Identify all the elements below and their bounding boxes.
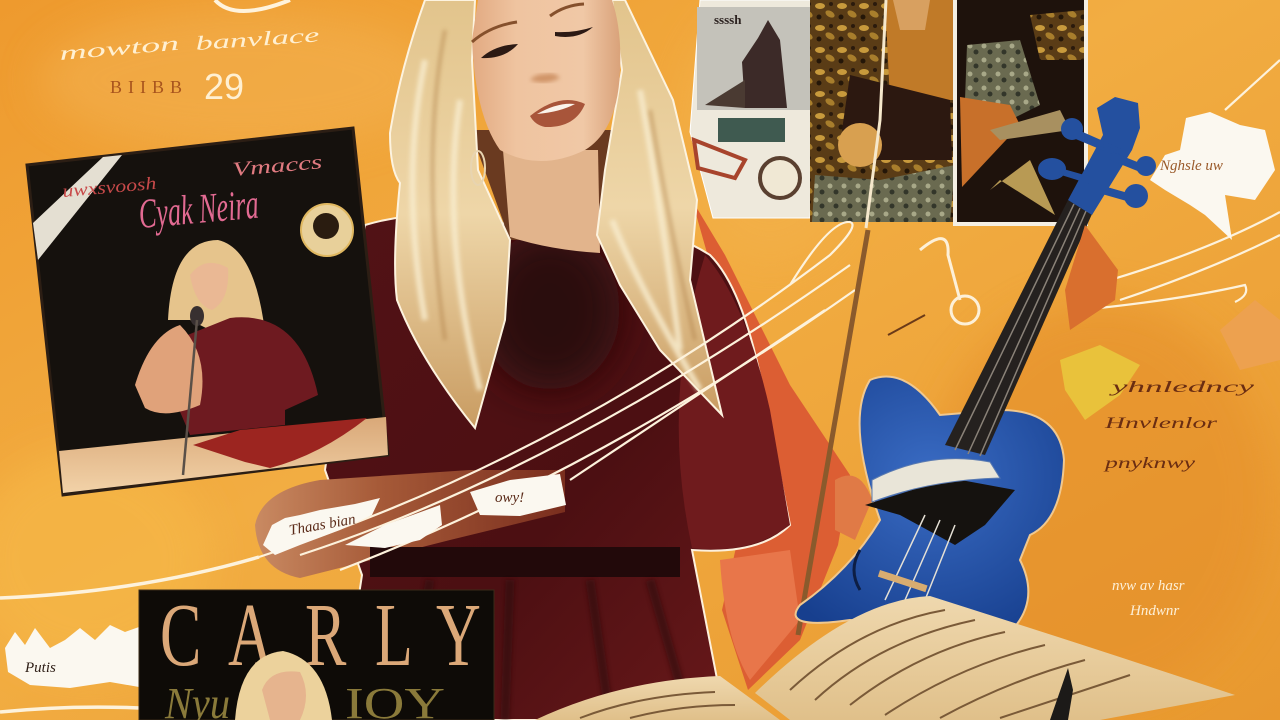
brows [472,4,584,42]
handwriting notes: yhnledncy [1108,379,1256,396]
hair right [597,0,722,415]
nose [530,74,560,83]
note lettering: Hndwnr [1129,603,1179,619]
collage of photos top right: ssssh [714,12,742,27]
dress [325,215,790,720]
bridge and sheet [865,478,1015,545]
forearm [255,470,565,578]
doodles on right [888,239,979,335]
singer [168,240,268,368]
orange hand [835,476,872,540]
neck shadows [470,130,620,240]
scribbled text top left: BIIBB [110,77,182,97]
note lettering: nvw av hasr [1112,578,1185,594]
orange sleeve behind the violin [692,200,850,690]
closed eyes [481,27,593,58]
corner stripe [33,155,122,260]
scribbled text top left: mowton [59,33,180,65]
right sleeve highlight [679,255,790,549]
violin [796,97,1156,630]
violin body [796,377,1064,630]
collage of photos top right [690,0,1088,228]
handwriting notes [1103,379,1256,472]
musician figure [255,0,790,720]
waistband [370,547,680,577]
skirt shading [405,580,690,720]
text: Nghsle uw [1159,158,1223,174]
gold splash [1060,345,1140,420]
small singer portrait [235,651,332,720]
earring [471,151,485,185]
scribbled text top left [59,0,320,107]
teeth [537,104,575,114]
handwriting notes: pnyknwy [1103,455,1196,472]
neck [503,150,600,253]
album cover: singer on stage [27,128,388,495]
lips [530,100,585,127]
scribbled text top left: banvlace [195,24,320,55]
text: Putis [24,660,56,676]
handwriting notes: Hnvlenlor [1103,415,1218,432]
dark chest shadow [480,230,620,390]
scribbled text top left: 29 [204,66,244,107]
patch on orange sleeve [720,550,800,680]
stage floor [59,417,388,493]
album title [62,151,323,238]
note lettering [1112,578,1185,619]
face [472,0,620,161]
album title: Vmaccs [232,151,323,181]
album cover: CARLY [139,585,494,720]
album badge [301,204,353,256]
hair left [390,0,510,428]
album title: Cyak Neira [137,182,260,238]
paint splashes [5,112,1275,688]
orange shapes right [1065,225,1118,330]
text: owy! [495,490,524,506]
scroll and pegs [1038,97,1156,215]
open book with pen [535,596,1235,720]
violin bow [798,230,868,635]
neck [945,200,1092,455]
splash lettering: Thaas bian [288,512,357,539]
album title: uwxsvoosh [62,173,157,201]
album cover: CARLY: CARLY [160,585,481,685]
